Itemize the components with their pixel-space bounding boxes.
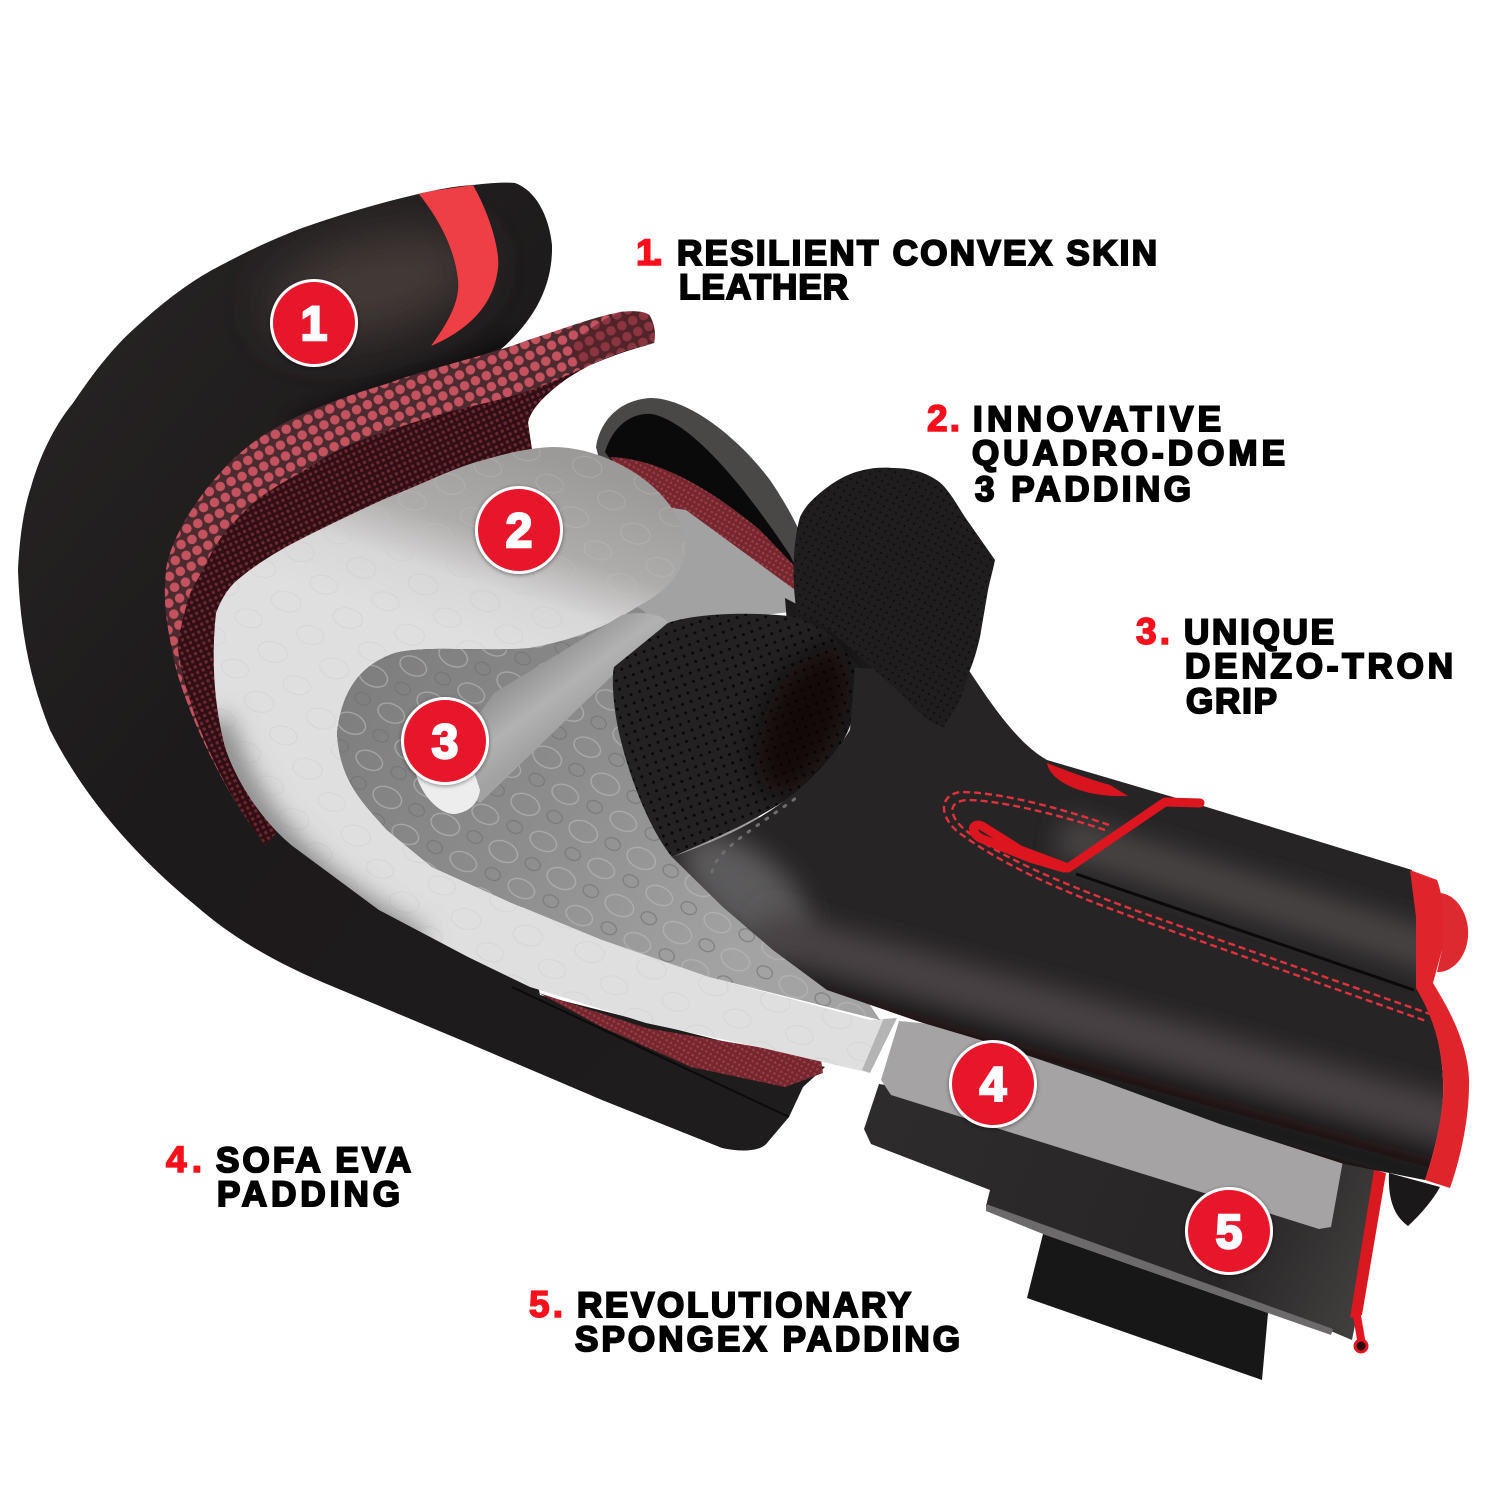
badge 5: 5 — [1216, 1206, 1242, 1259]
badge 1: 1 — [301, 298, 327, 351]
seam bumps — [712, 795, 800, 872]
spongex padding layer — [864, 1084, 1386, 1352]
label 2 — [927, 398, 1285, 509]
label 3: DENZO-TRON — [1185, 647, 1453, 686]
badge 2 — [476, 488, 562, 572]
back flat strap — [986, 1204, 1333, 1380]
label 1 — [636, 232, 1157, 307]
rear strap under cuff — [1389, 1173, 1440, 1226]
outer leather shell — [18, 183, 825, 1150]
label 2: 3 PADDING — [975, 470, 1191, 509]
label 4: PADDING — [217, 1175, 400, 1214]
sofa eva padding layer — [881, 1021, 1344, 1229]
label 4 — [166, 1139, 411, 1214]
label 1: 1. — [636, 232, 663, 273]
badge 1 — [272, 280, 356, 366]
badge 4 — [950, 1042, 1036, 1126]
pebbled inner foam — [337, 607, 880, 1020]
label 2: 2. — [927, 398, 960, 439]
badge 3: 3 — [432, 716, 458, 769]
quadro-dome foam padding — [214, 447, 897, 1073]
label 3 — [1136, 611, 1453, 721]
label 5 — [529, 1284, 960, 1359]
thumb flap behind — [596, 398, 806, 600]
label 4: SOFA EVA — [216, 1141, 411, 1180]
badge 4: 4 — [980, 1059, 1007, 1112]
red leather stripe — [418, 185, 498, 346]
label 5: REVOLUTIONARY — [577, 1286, 911, 1325]
label 1: LEATHER — [679, 268, 848, 307]
foam grip tube — [415, 613, 668, 814]
label 3: 3. — [1136, 611, 1170, 652]
label 2: QUADRO-DOME — [972, 434, 1285, 473]
black mesh hand opening — [613, 614, 860, 857]
main sleeve — [663, 668, 1500, 1190]
badge 3 — [402, 698, 488, 784]
gap filler behind hand and flap — [785, 598, 885, 720]
red strap piping — [973, 802, 1200, 868]
stitching — [944, 792, 1430, 1021]
label 4: 4. — [166, 1139, 202, 1180]
red mesh lining — [165, 311, 655, 845]
label 5: 5. — [529, 1284, 563, 1325]
black mesh flap — [794, 468, 995, 727]
red cuff trim — [1410, 870, 1469, 1188]
badge 5 — [1186, 1188, 1272, 1274]
label 5: SPONGEX PADDING — [575, 1320, 960, 1359]
badge 2: 2 — [506, 505, 532, 558]
glove illustration — [18, 183, 1500, 1380]
label 2: INNOVATIVE — [973, 400, 1221, 439]
label 1: RESILIENT CONVEX SKIN — [677, 234, 1157, 273]
upper panel seam — [1076, 874, 1414, 990]
label 3: GRIP — [1186, 682, 1277, 721]
lower red mesh strip — [539, 993, 823, 1087]
red patch — [1047, 763, 1128, 796]
label 3: UNIQUE — [1184, 613, 1334, 652]
denser foam wedge — [620, 500, 802, 626]
